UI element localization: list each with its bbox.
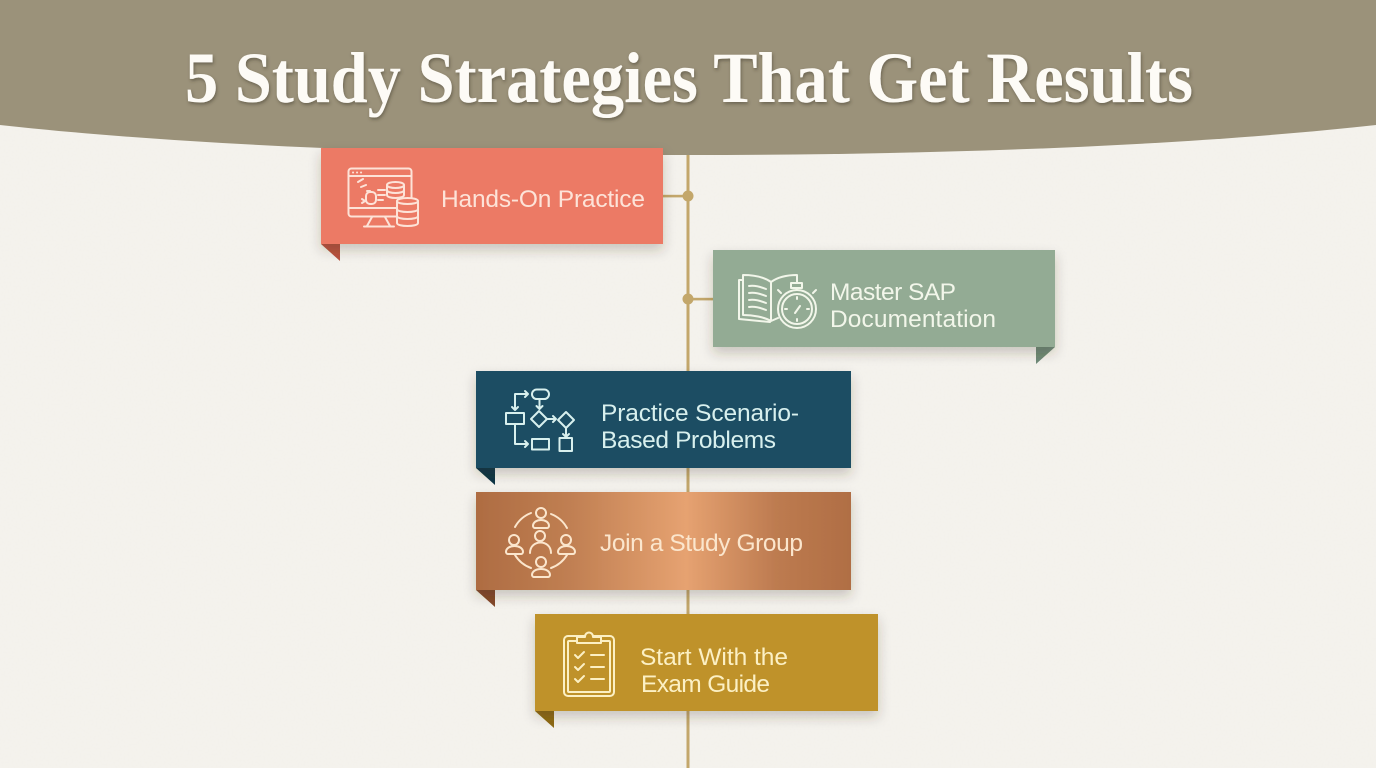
label — [640, 644, 788, 698]
panel: Practice Scenario-Based Problems — [476, 371, 851, 485]
label: Practice Scenario- — [601, 400, 799, 427]
label — [830, 279, 996, 333]
icon: flowchart — [506, 390, 574, 451]
icon: monitor with databases — [348, 168, 418, 226]
icon: open book and stopwatch — [739, 275, 816, 328]
icon: study group circle — [506, 508, 575, 577]
panel: Master SAP Documentation — [713, 250, 1055, 364]
label: Based Problems — [601, 427, 776, 454]
timeline spine — [686, 150, 690, 768]
label: Start With the — [640, 644, 788, 671]
title: 5 Study Strategies That Get Results — [185, 38, 1193, 118]
connector: step 2 — [682, 294, 713, 304]
panel: Join a Study Group — [476, 492, 851, 607]
label: Exam Guide — [641, 671, 770, 698]
label: Join a Study Group — [600, 530, 803, 557]
label — [601, 400, 799, 454]
label: Master SAP — [830, 279, 956, 306]
header band — [0, 0, 1376, 155]
panel: Start With the Exam Guide — [535, 614, 878, 728]
panel: Hands-On Practice — [321, 148, 663, 261]
label: Hands-On Practice — [441, 186, 645, 213]
connector: step 1 — [663, 190, 694, 202]
label: Documentation — [830, 306, 996, 333]
icon: clipboard checklist — [564, 632, 614, 696]
